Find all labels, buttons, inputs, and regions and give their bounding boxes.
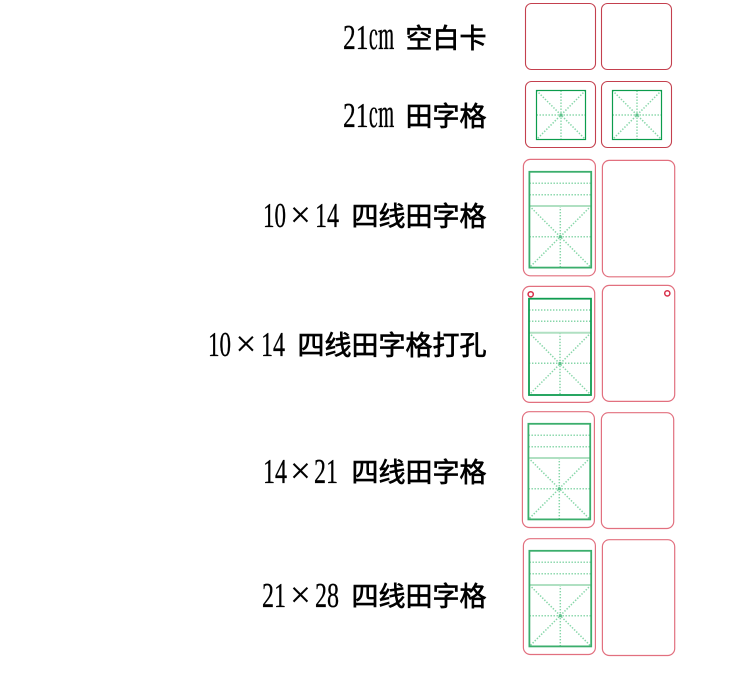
label: 14x21 four-line grid: 14 <box>263 452 287 491</box>
label: 21cm grid card: 21㎝ <box>343 96 394 135</box>
label: 21cm grid card <box>343 96 486 135</box>
label: 21x28 four-line grid: 28 <box>315 576 339 615</box>
label: 10x14 four-line grid <box>263 195 486 236</box>
label: 14x21 four-line grid: × <box>290 451 311 492</box>
label: 21cm blank card: 21㎝ <box>343 18 394 57</box>
label: 14x21 four-line grid <box>263 451 486 492</box>
label: 10x14 four-line grid: × <box>290 195 311 236</box>
label: 14x21 four-line grid: 21 <box>314 452 338 491</box>
label: 10x14 four-line grid with punched hole: 10 <box>208 325 231 364</box>
cards: 14x21 four-line grid pair <box>522 412 674 528</box>
label: 10x14 four-line grid: 10 <box>263 196 286 235</box>
cards: 10x14 four-line grid pair <box>523 159 675 277</box>
label: 10x14 four-line grid with punched hole <box>208 324 486 365</box>
label: 10x14 four-line grid: 四线田字格 <box>352 202 486 232</box>
cards: 21cm blank pair <box>526 4 672 70</box>
cards: 21x28 four-line grid pair <box>523 539 675 656</box>
label: 21x28 four-line grid <box>262 575 486 616</box>
cards: 10x14 punched pair <box>523 285 675 402</box>
label: 10x14 four-line grid with punched hole: × <box>236 324 256 365</box>
label: 21cm grid card: 田字格 <box>406 102 486 132</box>
label: 14x21 four-line grid: 四线田字格 <box>352 458 486 488</box>
cards: 21cm grid pair <box>526 82 672 148</box>
label: 10x14 four-line grid with punched hole: 14 <box>261 325 285 364</box>
label: 21x28 four-line grid: × <box>290 575 311 616</box>
label: 21x28 four-line grid: 21 <box>262 576 286 615</box>
label: 21cm blank card: 空白卡 <box>406 24 486 54</box>
label: 10x14 four-line grid: 14 <box>315 196 339 235</box>
label: 10x14 four-line grid with punched hole: 四线田字格打孔 <box>298 331 486 361</box>
label: 21x28 four-line grid: 四线田字格 <box>352 582 486 612</box>
label: 21cm blank card <box>343 18 486 57</box>
